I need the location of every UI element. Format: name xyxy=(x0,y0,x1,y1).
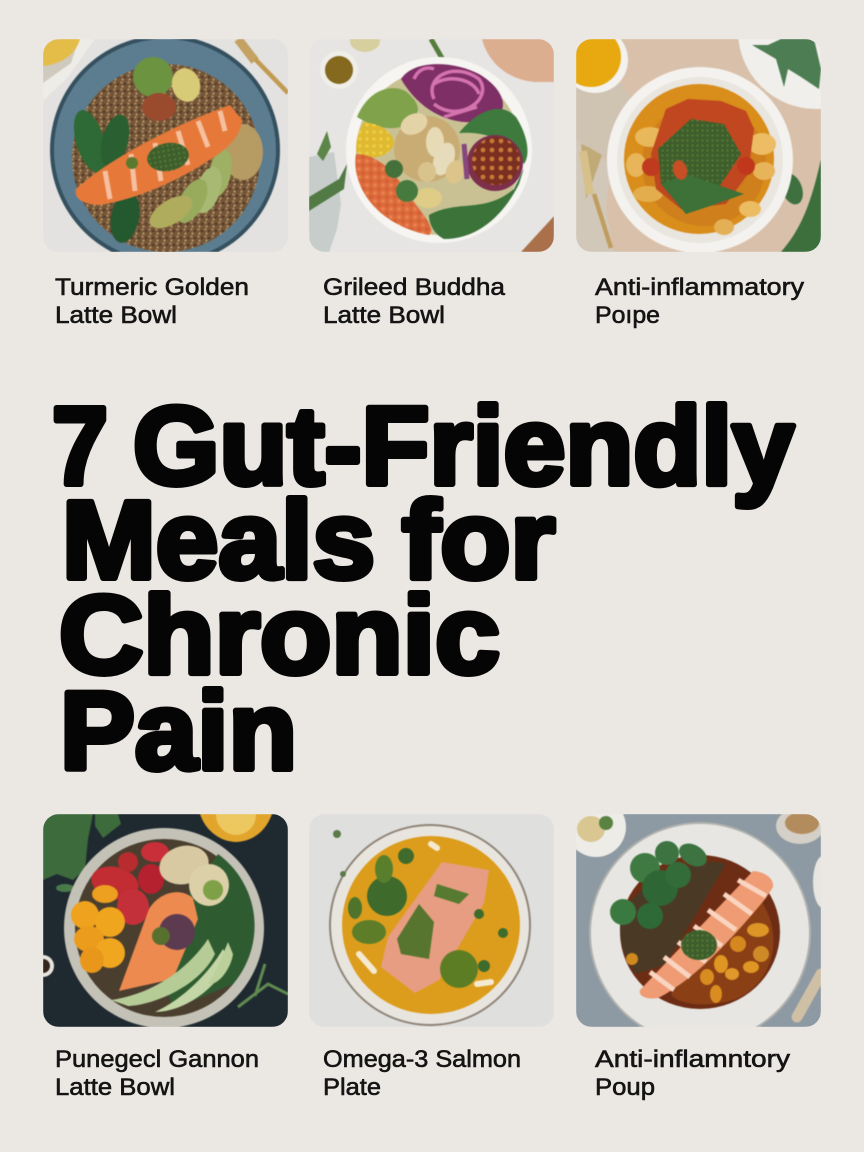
caption: meal 2 xyxy=(323,274,506,329)
title: Chronic xyxy=(59,574,500,697)
caption: meal 2: Latte Bowl xyxy=(323,302,445,329)
photo: buddha bowl xyxy=(309,39,554,252)
title: Pain xyxy=(60,670,297,790)
caption: meal 1 xyxy=(55,274,249,329)
caption: meal 2: Grileed Buddha xyxy=(323,274,506,301)
caption: meal 3: Poıpe xyxy=(595,302,660,329)
caption: meal 6: Poup xyxy=(595,1074,655,1101)
caption: meal 5: Plate xyxy=(323,1074,381,1101)
photo: orange soup bowl xyxy=(576,39,821,252)
caption: meal 3: Anti-inflammatory xyxy=(595,274,804,301)
caption: meal 4: Latte Bowl xyxy=(55,1074,175,1101)
title: Meals xyxy=(62,479,375,602)
caption: meal 6 xyxy=(594,1046,790,1101)
caption: meal 6: Anti-inflamntory xyxy=(595,1046,790,1073)
title xyxy=(52,390,796,790)
photo: salmon plate with beans xyxy=(576,814,821,1027)
caption: meal 4: Punegecl Gannon xyxy=(55,1046,259,1073)
photo: dark rainbow bowl xyxy=(43,814,288,1027)
caption: meal 1: Turmeric Golden xyxy=(55,274,249,301)
caption: meal 5 xyxy=(323,1046,521,1101)
caption: meal 4 xyxy=(55,1046,259,1101)
photo: salmon quinoa bowl xyxy=(43,39,288,252)
title: for xyxy=(402,479,555,602)
caption: meal 1: Latte Bowl xyxy=(55,302,177,329)
caption: meal 3 xyxy=(594,274,804,329)
caption: meal 5: Omega-3 Salmon xyxy=(323,1046,521,1073)
photo: salmon in golden soup xyxy=(310,814,554,1027)
